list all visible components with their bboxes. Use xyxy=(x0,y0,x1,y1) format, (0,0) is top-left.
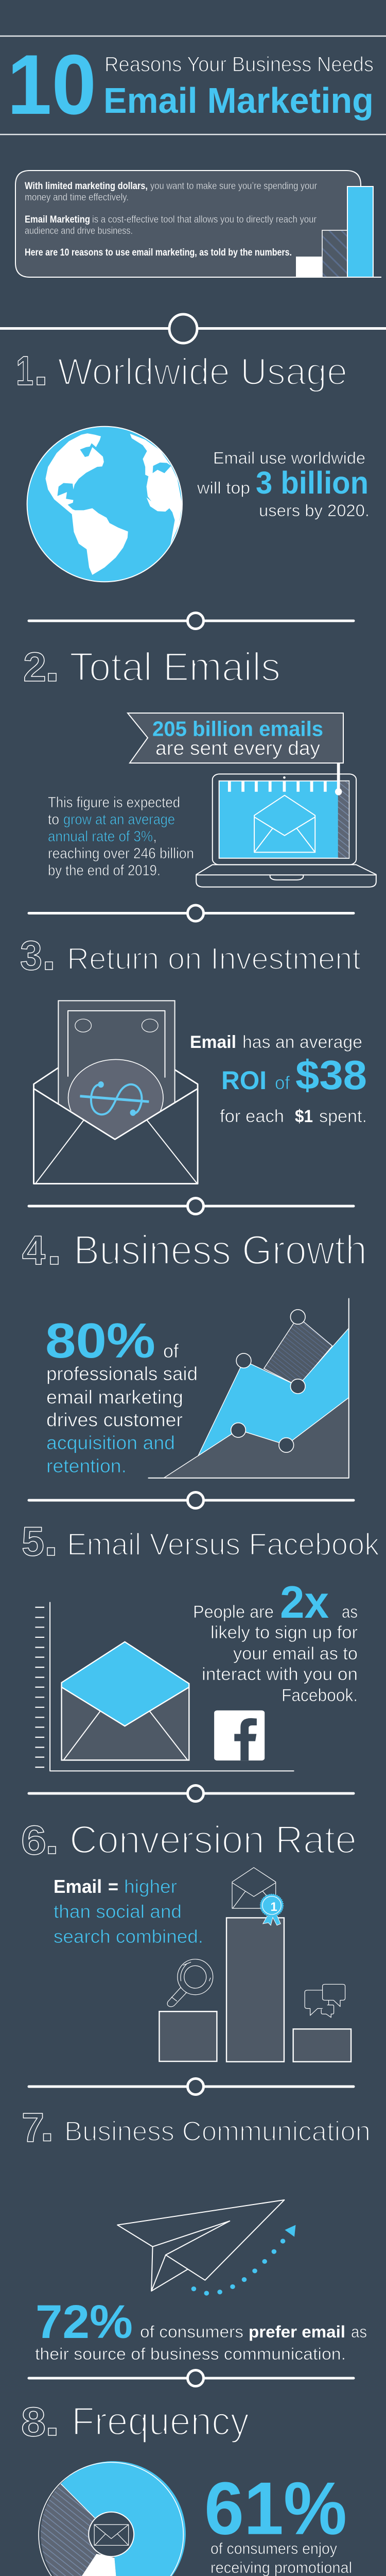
chart: frequency donut xyxy=(39,2461,186,2576)
banner: 205 billion emails: are sent every day xyxy=(155,738,320,759)
icon: chat bubbles xyxy=(305,1984,345,2018)
heading: 3 Return on Investment: Return on Investment xyxy=(67,942,361,976)
title xyxy=(0,36,386,134)
title: Reasons Your Business Needs xyxy=(104,53,374,76)
text: conversion rate: than social and xyxy=(54,1901,182,1922)
intro text: With limited marketing dollars, xyxy=(25,181,148,192)
text: business communication: their source of business communication. xyxy=(35,2345,346,2363)
divider xyxy=(29,613,354,629)
intro text: Here are 10 reasons to use email marketing, as told by the numbers. xyxy=(25,247,292,258)
text: business growth xyxy=(45,1313,198,1477)
text: business growth: acquisition and xyxy=(46,1432,175,1453)
text: worldwide usage: 3 billion xyxy=(256,465,369,500)
text: return on investment: ROI xyxy=(221,1066,267,1095)
title: 10 xyxy=(7,37,96,132)
text: return on investment: $38 xyxy=(295,1052,367,1098)
text: total emails: annual rate of 3% xyxy=(48,828,153,845)
icon: facebook xyxy=(214,1710,265,1760)
divider xyxy=(0,314,386,343)
intro text: audience and drive business. xyxy=(25,226,133,236)
divider xyxy=(29,2370,354,2386)
text: email versus facebook: likely to sign up for xyxy=(210,1623,358,1642)
text: email versus facebook: interact with you on xyxy=(202,1665,358,1684)
text: total emails xyxy=(48,794,194,879)
text: business communication: of consumers xyxy=(140,2323,243,2341)
text: total emails: to xyxy=(48,811,59,828)
intro text: is a cost-effective tool that allows you to directly reach your xyxy=(92,214,317,225)
divider xyxy=(29,1492,354,1509)
text: business communication: prefer email xyxy=(249,2323,345,2341)
heading: 7 Business Communication xyxy=(22,2105,371,2150)
text: business growth: retention. xyxy=(46,1455,127,1477)
text: business growth: email marketing xyxy=(46,1387,183,1408)
intro text: you want to make sure you’re spending your xyxy=(150,181,318,192)
text: email versus facebook: 2x xyxy=(280,1577,329,1628)
text: email versus facebook: Facebook. xyxy=(282,1686,358,1705)
icon: envelope with money xyxy=(34,1001,198,1184)
heading: 8 Frequency: 8 xyxy=(21,2399,46,2445)
text: email versus facebook: People are xyxy=(193,1602,274,1622)
heading: 6 Conversion Rate: Conversion Rate xyxy=(69,1818,357,1862)
text: worldwide usage: users by 2020. xyxy=(259,501,370,520)
badge number: 1 xyxy=(270,1900,277,1914)
text: business communication: 72% xyxy=(36,2296,133,2348)
divider xyxy=(29,2078,354,2095)
icon: laptop with envelope xyxy=(196,763,376,887)
heading: 5 Email Versus Facebook: 5 xyxy=(22,1518,44,1564)
text: conversion rate: higher xyxy=(124,1876,177,1897)
heading: 2 Total Emails: 2 xyxy=(23,644,46,690)
text: conversion rate xyxy=(54,1876,203,1947)
banner: 205 billion emails: 205 billion emails xyxy=(152,717,323,741)
heading: 6 Conversion Rate: 6 xyxy=(21,1817,46,1863)
heading: 5 Email Versus Facebook xyxy=(22,1518,380,1564)
heading: 1 Worldwide Usage: Worldwide Usage xyxy=(58,351,347,393)
text: return on investment: of xyxy=(275,1072,290,1093)
chart: search email social bars xyxy=(159,1868,351,2062)
intro text xyxy=(25,181,318,258)
divider xyxy=(29,1198,354,1214)
text: return on investment xyxy=(190,1032,367,1126)
text: business growth: drives customer xyxy=(46,1410,183,1430)
heading: 2 Total Emails: Total Emails xyxy=(69,644,280,689)
icon: envelope and facebook on axes xyxy=(35,1602,294,1771)
text: return on investment: spent. xyxy=(319,1107,367,1126)
icon: magnifier xyxy=(167,1959,213,2007)
text: return on investment: Email xyxy=(190,1032,236,1052)
heading: 8 Frequency: Frequency xyxy=(72,2399,249,2444)
heading: 7 Business Communication: 7 xyxy=(22,2105,44,2150)
text: worldwide usage xyxy=(197,449,370,520)
text: frequency: receiving promotional xyxy=(210,2558,352,2576)
icon: paper plane xyxy=(117,2200,295,2296)
text: frequency xyxy=(75,2467,352,2576)
text: email versus facebook: as xyxy=(342,1602,358,1622)
text: email versus facebook xyxy=(193,1577,358,1705)
text: worldwide usage: will top xyxy=(197,479,250,497)
text: total emails: , xyxy=(153,828,157,845)
text: return on investment: $1 xyxy=(295,1107,313,1126)
arrow: dotted path xyxy=(191,2225,295,2296)
text: conversion rate: Email xyxy=(54,1876,102,1897)
intro text: Email Marketing xyxy=(25,214,90,225)
heading: 7 Business Communication: Business Communication xyxy=(64,2116,371,2147)
text: frequency: of consumers enjoy xyxy=(210,2539,337,2557)
intro bar chart xyxy=(296,187,373,277)
chart: area growth xyxy=(148,1299,349,1478)
icon: rank badge xyxy=(260,1894,283,1925)
text: frequency: 61% xyxy=(204,2467,347,2550)
text: conversion rate: search combined. xyxy=(54,1926,203,1947)
banner: 205 billion emails xyxy=(128,713,343,763)
panel: intro xyxy=(15,171,382,277)
text: business communication: as xyxy=(351,2323,367,2341)
icon: envelope xyxy=(94,2524,129,2545)
text: total emails: reaching over 246 billion xyxy=(48,845,194,862)
text: worldwide usage: Email use worldwide xyxy=(213,449,365,467)
intro text: money and time effectively. xyxy=(25,192,129,203)
heading: 4 Business Growth: 4 xyxy=(22,1227,46,1273)
divider xyxy=(29,1786,354,1801)
text: total emails: by the end of 2019. xyxy=(48,862,161,879)
icon: envelope xyxy=(232,1868,276,1908)
text: total emails: grow at an average xyxy=(63,811,175,828)
text: business growth: of xyxy=(163,1341,179,1362)
divider xyxy=(29,905,354,921)
heading: 3 Return on Investment xyxy=(20,933,361,978)
heading: 5 Email Versus Facebook: Email Versus Facebook xyxy=(67,1527,380,1562)
heading: 4 Business Growth: Business Growth xyxy=(74,1227,367,1273)
text: business communication xyxy=(35,2296,367,2363)
text: email versus facebook: your email as to xyxy=(233,1644,358,1664)
title: Email Marketing xyxy=(103,80,374,121)
text: total emails: This figure is expected xyxy=(48,794,180,811)
heading: 3 Return on Investment: 3 xyxy=(20,933,42,978)
icon: globe xyxy=(27,427,182,582)
text: business growth: 80% xyxy=(45,1313,155,1368)
text: return on investment: for each xyxy=(220,1107,284,1126)
text: return on investment: has an average xyxy=(242,1032,362,1052)
text: business growth: professionals said xyxy=(46,1363,198,1384)
heading: 1 Worldwide Usage: 1 xyxy=(16,348,33,394)
text: conversion rate: = xyxy=(108,1876,118,1897)
